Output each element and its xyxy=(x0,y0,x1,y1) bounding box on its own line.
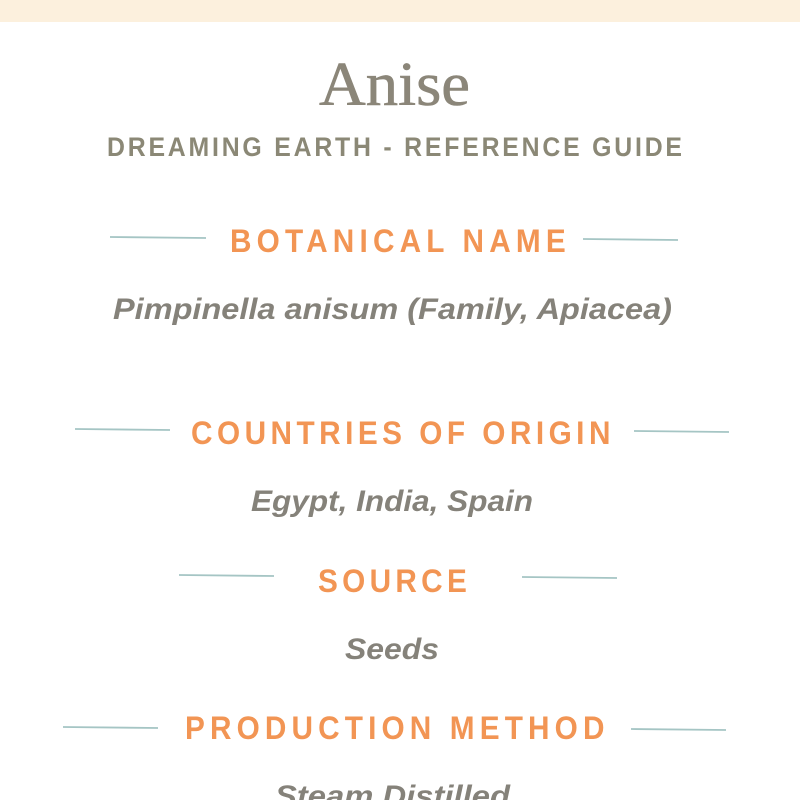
section: source: SOURCE xyxy=(318,563,467,599)
section: botanical name: BOTANICAL NAME xyxy=(230,223,566,259)
section: countries of origin: COUNTRIES OF ORIGIN xyxy=(191,415,610,451)
section: source: Seeds xyxy=(345,633,439,666)
section: source xyxy=(179,563,617,666)
title: Anise: Anise xyxy=(319,51,470,119)
section: countries of origin: Egypt, India, Spain xyxy=(251,485,533,518)
top banner xyxy=(0,0,800,22)
section: botanical name: Pimpinella anisum (Family, Apiacea) xyxy=(113,293,672,326)
section: production method xyxy=(63,710,726,800)
subtitle: DREAMING EARTH - REFERENCE GUIDE xyxy=(107,133,682,162)
section: production method: PRODUCTION METHOD xyxy=(185,710,604,746)
section: botanical name xyxy=(110,223,678,326)
section: countries of origin xyxy=(75,415,729,518)
